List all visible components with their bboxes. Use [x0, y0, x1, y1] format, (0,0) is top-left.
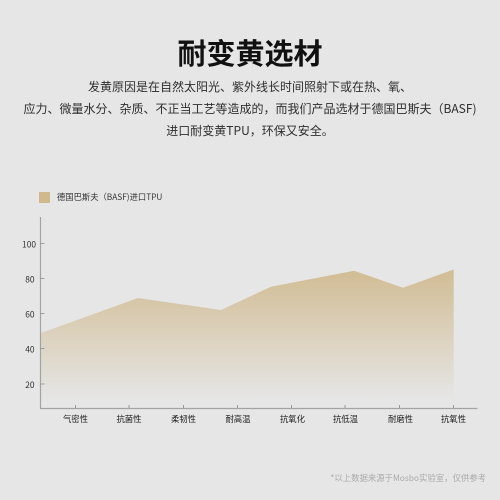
y axis labels: 100: [22, 238, 36, 250]
intro text block: 发黄原因是在自然太阳光、紫外线长时间照射下或在热、氧、: [88, 78, 412, 95]
x axis labels: 抗氧性: [441, 413, 466, 425]
legend label: 德国巴斯夫（BASF)进口TPU: [57, 191, 162, 203]
y axis labels: 20: [25, 379, 35, 391]
area series: [41, 270, 454, 408]
intro text block: 进口耐变黄TPU，环保又安全。: [166, 122, 334, 139]
y axis labels: 60: [25, 308, 35, 320]
y axis labels: [22, 238, 36, 391]
x axis labels: 耐磨性: [388, 413, 413, 425]
x axis labels: 柔韧性: [171, 413, 196, 425]
footnote: *以上数据来源于Mosbo实验室，仅供参考: [330, 472, 486, 484]
y axis labels: 40: [25, 344, 35, 356]
x axis labels: 耐高温: [225, 413, 251, 425]
intro text block: [23, 78, 476, 139]
axes: [40, 217, 478, 408]
legend: [39, 191, 162, 203]
x axis labels: [63, 413, 466, 425]
title: 耐变黄选材: [177, 31, 322, 73]
x axis labels: 抗氧化: [280, 413, 306, 425]
y axis labels: 80: [25, 274, 35, 286]
legend swatch: [39, 192, 50, 203]
x axis labels: 抗低温: [333, 413, 359, 425]
intro text block: 应力、微量水分、杂质、不正当工艺等造成的，而我们产品选材于德国巴斯夫（BASF): [23, 100, 476, 117]
x axis labels: 气密性: [63, 413, 88, 425]
x axis labels: 抗菌性: [116, 413, 142, 425]
